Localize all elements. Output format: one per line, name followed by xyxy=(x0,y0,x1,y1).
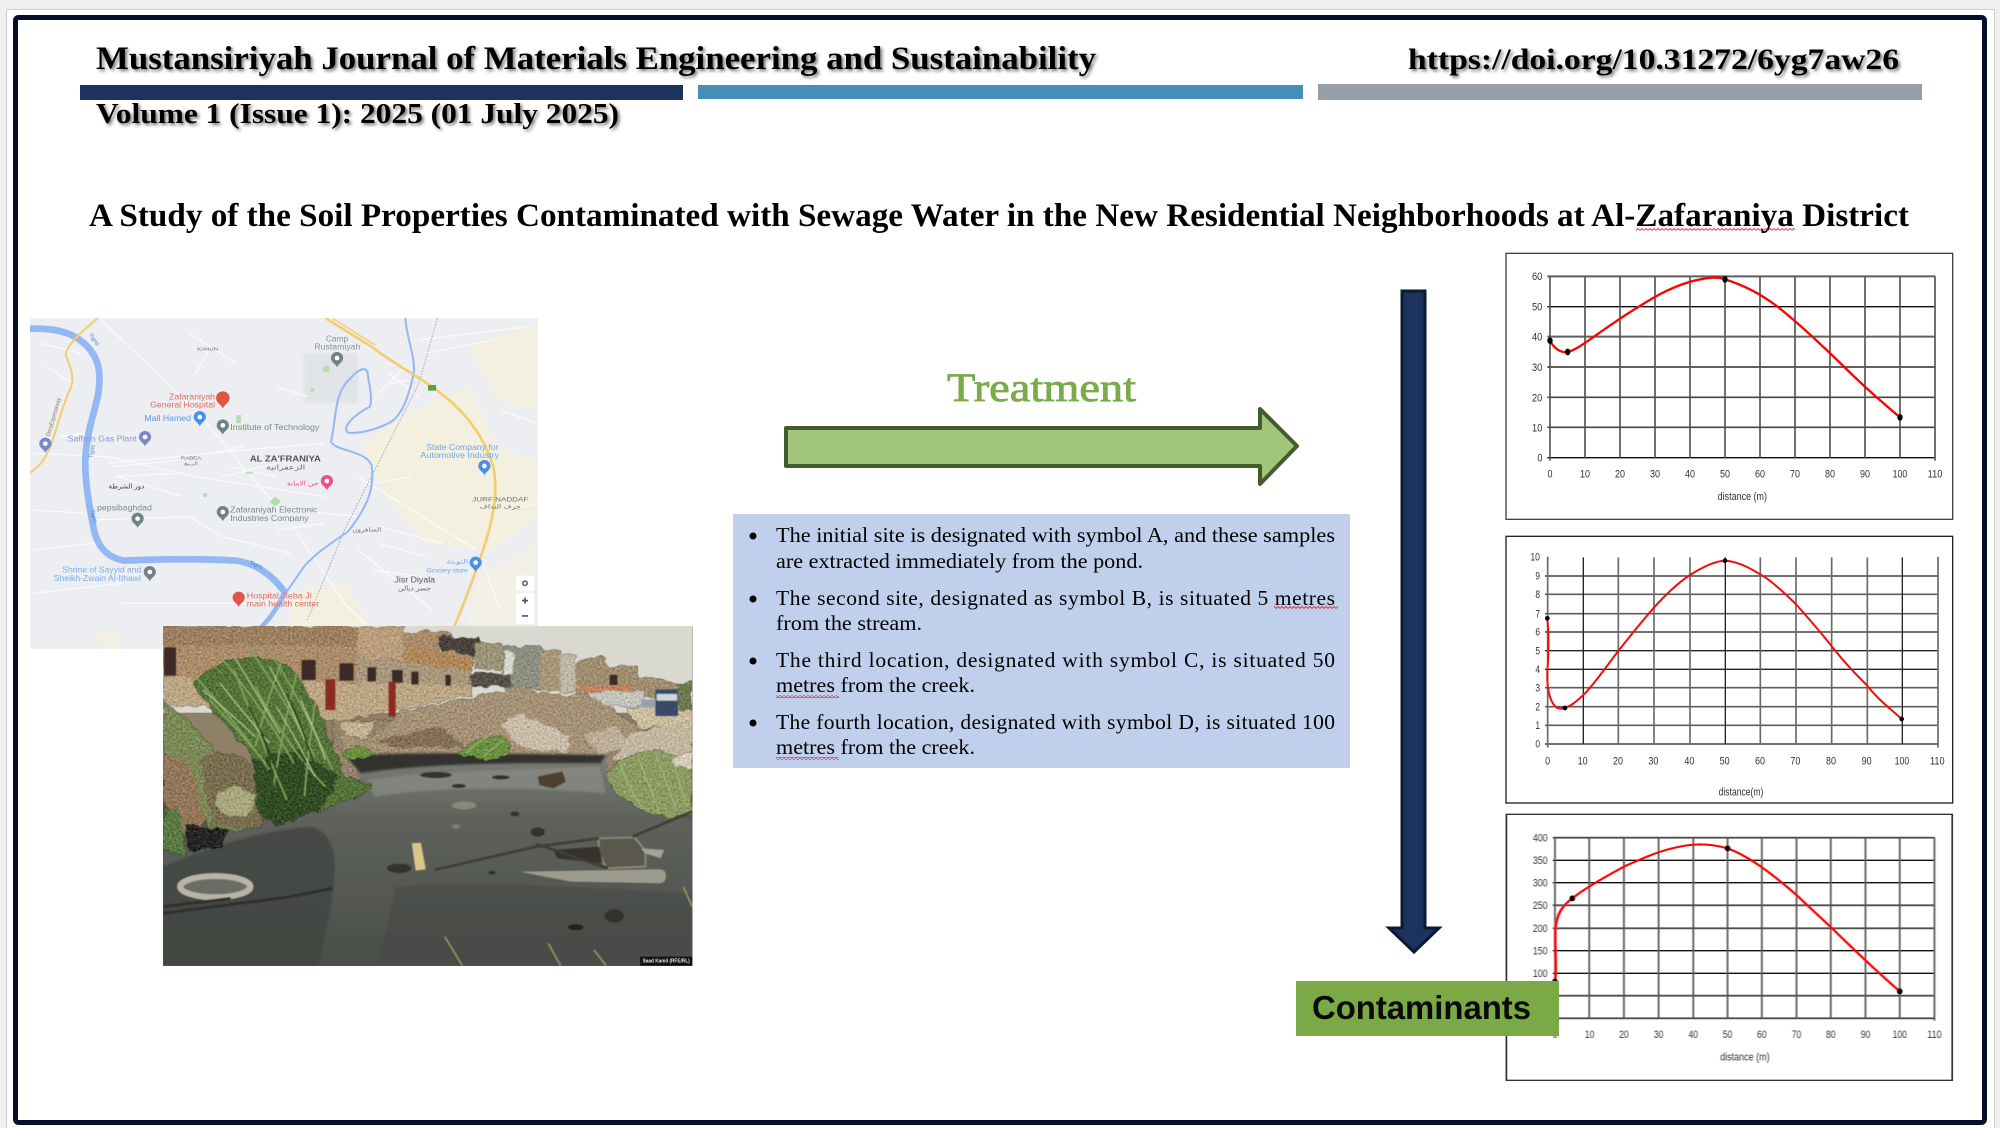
x axis labels: 0 xyxy=(1545,755,1550,767)
y axis labels: 20 xyxy=(1532,392,1542,404)
map labels: Shrine of Sayyid and xyxy=(62,565,142,575)
map labels: Tigris xyxy=(88,444,97,459)
bullet 3 xyxy=(750,648,1335,698)
map labels: جسر ديالى xyxy=(398,586,431,593)
x axis labels: 30 xyxy=(1654,1029,1663,1041)
x axis labels: 0 xyxy=(1553,1029,1557,1041)
map labels: pepsibaghdad xyxy=(97,503,152,513)
x axis labels: 80 xyxy=(1826,755,1836,767)
map labels: Zafaraniyah Electronic xyxy=(230,505,317,515)
x axis labels: 20 xyxy=(1615,468,1625,480)
bullet 1 xyxy=(750,523,1335,573)
Tigris river xyxy=(30,318,414,627)
photo base tones xyxy=(163,626,692,966)
x axis labels: 30 xyxy=(1648,755,1658,767)
street texture xyxy=(34,320,537,649)
map labels: دور الشرطة xyxy=(109,483,144,490)
x axis labels: 80 xyxy=(1826,1029,1836,1041)
x axis labels: 90 xyxy=(1862,755,1872,767)
x axis labels: 0 xyxy=(1547,468,1553,480)
y axis labels: 0 xyxy=(1537,453,1542,465)
tall reeds mass xyxy=(192,657,375,825)
Diyala river xyxy=(285,318,414,593)
map labels: Hospital Jieba Ji xyxy=(247,590,312,600)
bullet 2 xyxy=(750,586,1338,635)
map labels: Institute of Technology xyxy=(230,422,320,432)
red data curve xyxy=(1547,561,1902,719)
map labels: Mall Hamed xyxy=(144,413,191,423)
x axis labels: 110 xyxy=(1930,755,1945,767)
x axis labels xyxy=(1545,755,1945,799)
y axis labels: 400 xyxy=(1533,832,1548,844)
bullet 3: The third location, designated with symbol C, is situated 50 xyxy=(776,648,1335,672)
sunken crate and sticks xyxy=(434,812,692,870)
x axis labels: 100 xyxy=(1893,468,1907,480)
grid xyxy=(1547,276,1935,461)
x axis labels: 50 xyxy=(1723,1029,1732,1041)
desert areas xyxy=(94,323,538,649)
map labels: Tigris xyxy=(248,560,264,571)
map labels: الزعفرانية xyxy=(266,464,305,471)
grid xyxy=(1545,557,1938,748)
left bank xyxy=(163,700,262,833)
map labels: RABEA xyxy=(181,455,202,460)
map labels: KANUN xyxy=(197,346,218,351)
highway marker xyxy=(428,385,436,391)
map labels: Automotive Industry xyxy=(421,450,500,460)
y axis labels: 250 xyxy=(1533,900,1548,912)
red data curve xyxy=(1550,278,1900,417)
x axis labels: 110 xyxy=(1928,468,1942,480)
x axis labels: 20 xyxy=(1613,755,1623,767)
map labels: JURF NADDAF xyxy=(472,496,528,503)
rail line xyxy=(307,318,437,620)
map labels: الربيع xyxy=(184,461,198,466)
map labels: Camp xyxy=(326,334,349,344)
x axis labels: 40 xyxy=(1684,755,1694,767)
study title: A Study of the Soil Properties Contaminated with Sewage Water in the New Residential Neighborhoods at Al-Zafaraniya District xyxy=(89,198,1909,234)
rubble heap xyxy=(332,720,641,780)
bullet 4: The fourth location, designated with symbol D, is situated 100 xyxy=(776,710,1335,734)
chart 1: value vs distance (0-60) xyxy=(1506,253,1953,519)
y axis labels xyxy=(1532,271,1542,465)
arrow: contaminants direction xyxy=(1389,291,1439,952)
photo credit xyxy=(640,957,692,966)
debris in water xyxy=(163,772,692,966)
map of Al Za'franiya xyxy=(30,318,538,649)
y axis labels xyxy=(1530,551,1540,751)
y axis labels: 2 xyxy=(1535,701,1540,713)
bullet 2: The second site, designated as symbol B, is situated 5 metres xyxy=(776,586,1335,610)
journal title: Mustansiriyah Journal of Materials Engineering and Sustainability xyxy=(96,41,1097,77)
x axis labels: 90 xyxy=(1861,1029,1870,1041)
y axis labels: 30 xyxy=(1532,362,1542,374)
y axis labels: 5 xyxy=(1535,645,1540,657)
x axis labels: 70 xyxy=(1790,755,1800,767)
y axis labels: 0 xyxy=(1535,739,1540,751)
grid xyxy=(1553,838,1934,1021)
data points xyxy=(1552,845,1903,994)
volume and issue: Volume 1 (Issue 1): 2025 (01 July 2025) xyxy=(96,98,619,130)
x axis labels: 30 xyxy=(1650,468,1660,480)
x axis labels xyxy=(1553,1029,1942,1063)
right bank grass xyxy=(606,751,692,818)
y axis labels: 50 xyxy=(1532,301,1542,313)
y axis labels: 100 xyxy=(1533,968,1548,980)
map labels: الساهرون xyxy=(352,527,382,534)
x axis labels: 100 xyxy=(1895,755,1909,767)
y axis labels: 3 xyxy=(1535,682,1540,694)
map labels xyxy=(46,333,528,609)
red data curve xyxy=(1555,844,1900,991)
chart 3: value vs distance (0-400) xyxy=(1506,814,1952,1080)
x axis labels: 90 xyxy=(1860,468,1870,480)
x axis labels: 80 xyxy=(1825,468,1835,480)
wooden plank xyxy=(412,843,426,871)
x axis labels: 70 xyxy=(1792,1029,1801,1041)
x axis labels: 10 xyxy=(1580,468,1590,480)
y axis labels: 50 xyxy=(1538,990,1548,1002)
x axis labels: distance (m) xyxy=(1720,1051,1770,1063)
photo credit: Saad Kamil (RFE/RL) xyxy=(643,959,690,965)
y axis labels xyxy=(1533,832,1548,1025)
map labels: Industries Company xyxy=(230,513,310,523)
map labels: Grocery store xyxy=(427,568,469,574)
header colour bars xyxy=(80,84,1922,100)
map labels: Zafaraniyah xyxy=(169,391,215,401)
y axis labels: 6 xyxy=(1535,627,1540,639)
foreground reeds xyxy=(445,887,692,966)
DOI link: https://doi.org/10.31272/6yg7aw26 xyxy=(1408,43,1899,76)
map labels: التوبتة xyxy=(447,558,469,565)
y axis labels: 150 xyxy=(1533,945,1548,957)
map labels: DoraExpressway xyxy=(46,397,63,437)
x axis labels: 10 xyxy=(1578,755,1588,767)
pipe xyxy=(520,869,666,883)
map labels: حي الامانة xyxy=(287,480,319,487)
y axis labels: 60 xyxy=(1532,271,1542,283)
x axis labels: 40 xyxy=(1685,468,1695,480)
map pins xyxy=(39,352,490,607)
houses and rubble layer xyxy=(163,626,692,780)
x axis labels: 70 xyxy=(1790,468,1800,480)
y axis labels: 200 xyxy=(1533,923,1548,935)
x axis labels: 100 xyxy=(1893,1029,1907,1041)
small parks xyxy=(203,366,330,507)
y axis labels: 10 xyxy=(1530,551,1540,563)
x axis labels xyxy=(1547,468,1942,503)
x axis labels: 60 xyxy=(1757,1029,1767,1041)
map labels: Saffron Gas Plant xyxy=(68,433,137,443)
Contaminants label: Contaminants xyxy=(1312,989,1531,1026)
y axis labels: 10 xyxy=(1532,422,1542,434)
y axis labels: 1 xyxy=(1535,720,1540,732)
data points xyxy=(1545,558,1904,721)
highways xyxy=(30,318,495,627)
y axis labels: 0 xyxy=(1543,1013,1548,1025)
old tyre xyxy=(163,876,332,913)
reed blades xyxy=(196,647,687,820)
sewage water xyxy=(163,753,692,966)
data points xyxy=(1547,276,1903,421)
arrow: treatment direction xyxy=(786,409,1297,484)
boundary wall xyxy=(163,677,473,722)
x axis labels: 40 xyxy=(1689,1029,1698,1041)
x axis labels: 60 xyxy=(1755,755,1765,767)
bullet 2: from the stream. xyxy=(776,611,922,635)
bullet 1: are extracted immediately from the pond. xyxy=(776,549,1143,573)
small bushes xyxy=(459,736,509,760)
panel: sampling locations xyxy=(733,514,1350,768)
map labels: General Hospital xyxy=(150,400,215,410)
y axis labels: 9 xyxy=(1535,571,1540,583)
Contaminants label xyxy=(1296,981,1559,1036)
x axis labels: 60 xyxy=(1755,468,1765,480)
map labels: State Company for xyxy=(426,442,499,452)
map labels: Jisr Diyala xyxy=(395,574,435,584)
bullet 4 xyxy=(750,710,1335,760)
map labels: Tigris xyxy=(88,509,98,524)
banks and vegetation xyxy=(163,657,692,857)
y axis labels: 40 xyxy=(1532,332,1542,344)
x axis labels: distance (m) xyxy=(1718,491,1767,503)
bullet 3: metres from the creek. xyxy=(776,673,975,697)
y axis labels: 7 xyxy=(1535,608,1540,620)
x axis labels: distance(m) xyxy=(1719,787,1763,799)
map zoom controls xyxy=(516,576,534,624)
photo of contaminated sewage water xyxy=(163,626,692,966)
x axis labels: 50 xyxy=(1720,468,1730,480)
map labels: main health center xyxy=(247,599,319,609)
map labels: Tigris xyxy=(87,333,100,347)
Treatment heading: Treatment xyxy=(947,365,1136,410)
x axis labels: 10 xyxy=(1585,1029,1595,1041)
x axis labels: 20 xyxy=(1619,1029,1629,1041)
bullet 1: The initial site is designated with symbol A, and these samples xyxy=(776,523,1335,547)
x axis labels: 50 xyxy=(1720,755,1730,767)
y axis labels: 4 xyxy=(1535,664,1540,676)
chart 2: value vs distance (0-10) xyxy=(1506,536,1953,803)
map labels: Sheikh-Zwain Al-Ithawi xyxy=(54,573,141,583)
map labels: جرف النداف xyxy=(480,503,521,510)
bullet 4: metres from the creek. xyxy=(776,735,975,759)
map labels: Rustamiyah xyxy=(314,342,361,352)
y axis labels: 8 xyxy=(1535,589,1540,601)
y axis labels: 300 xyxy=(1533,877,1548,889)
row of houses xyxy=(163,626,680,707)
map labels: AL ZA'FRANIYA xyxy=(250,454,321,464)
x axis labels: 110 xyxy=(1927,1029,1942,1041)
y axis labels: 350 xyxy=(1533,855,1548,867)
windows and gates xyxy=(164,647,678,717)
